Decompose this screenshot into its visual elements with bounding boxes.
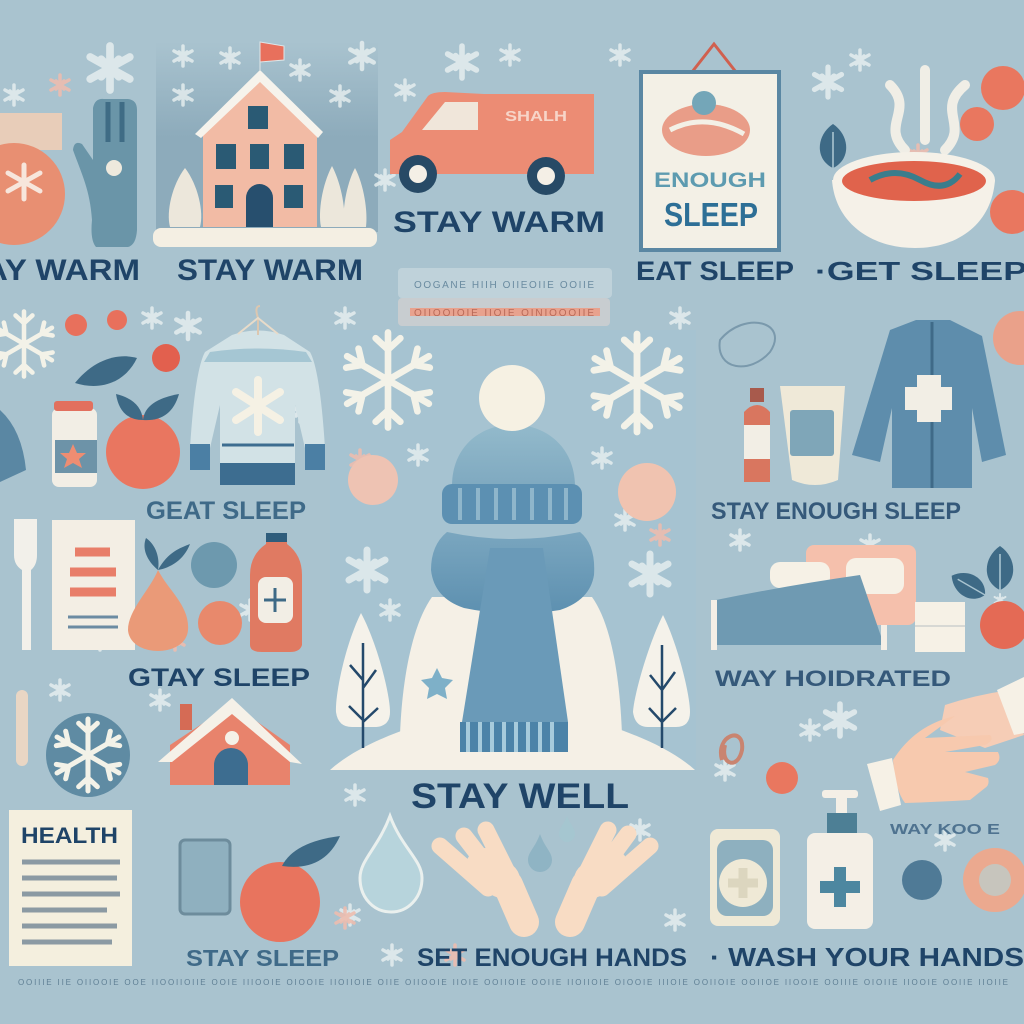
panel: hands and soap xyxy=(710,677,1024,972)
icon: heart xyxy=(65,314,87,336)
heading: stay enough sleep: STAY ENOUGH SLEEP xyxy=(711,498,961,525)
icon: soap bottle xyxy=(807,790,873,929)
panel: house backdrop xyxy=(156,42,378,232)
icon: large snowflakes xyxy=(346,332,430,428)
icon: health document xyxy=(9,810,132,966)
panel: van xyxy=(390,92,605,239)
icon: right tree xyxy=(633,615,690,748)
note small lines xyxy=(68,617,118,627)
icon: red flower xyxy=(152,344,180,372)
icon: scarf wrap xyxy=(431,532,594,614)
icon: van body xyxy=(390,92,594,174)
icon: bottle xyxy=(744,388,770,482)
icon: swirl xyxy=(721,736,742,763)
icon: nightstand xyxy=(915,602,965,652)
heading: way hoidrated: WAY HOIDRATED xyxy=(715,666,951,691)
icon: snow mound xyxy=(400,597,622,735)
icon: cup xyxy=(780,386,845,485)
icon: cardigan xyxy=(852,320,1006,488)
icon: cuff xyxy=(867,758,901,811)
icon: orange ball xyxy=(198,601,242,645)
icon: glass of water xyxy=(180,840,230,914)
icon: sleeve band xyxy=(997,677,1024,735)
document lines xyxy=(22,862,120,942)
panel: fork and fruit xyxy=(14,519,310,692)
heading: get sleep: ·GET SLEEP xyxy=(815,256,1024,286)
heading: stay well: STAY WELL xyxy=(411,777,629,816)
icon: apple xyxy=(106,394,180,489)
heading: set enough hands: SET ENOUGH HANDS xyxy=(417,944,687,972)
icon: water drop xyxy=(360,816,422,912)
icon: pom pom xyxy=(479,365,545,431)
panel: enough sleep poster xyxy=(636,44,794,286)
icon: orange slices xyxy=(981,66,1024,110)
poster text: enough: ENOUGH xyxy=(654,169,766,192)
icon: pear leaves xyxy=(144,538,190,570)
icon: flag xyxy=(260,42,284,70)
icon: hat brim xyxy=(442,484,582,524)
icon: jar xyxy=(52,401,97,487)
icon: fruit flower xyxy=(8,165,40,199)
icon: house walls xyxy=(203,78,317,227)
icon: hanger xyxy=(692,44,736,72)
icon: pillows xyxy=(846,558,904,594)
icon: glove spot xyxy=(106,160,122,176)
icon: flower orange xyxy=(963,848,1024,912)
icon: apple xyxy=(980,601,1024,649)
heading: stay warm: STAY WARM xyxy=(393,206,605,239)
small faded heading: WAY KOO E xyxy=(890,821,1000,838)
panel: soup bowl xyxy=(815,66,1024,286)
icon: big snowflake xyxy=(0,312,53,376)
icon: note xyxy=(52,520,135,650)
icon: poster art xyxy=(662,91,750,156)
icon: windows xyxy=(215,106,304,208)
icon: mound flower xyxy=(421,668,453,699)
icon: steam xyxy=(890,70,965,150)
icon: thermometer xyxy=(16,690,28,766)
heading: eat sleep: EAT SLEEP xyxy=(636,256,794,286)
icon: glove fingers xyxy=(108,102,122,142)
icon: right hand xyxy=(570,830,650,922)
icon: soap bar xyxy=(710,829,780,926)
icon: bottle xyxy=(250,533,302,652)
panel: health xyxy=(9,690,340,971)
panel: house xyxy=(153,42,377,287)
icon: beanie xyxy=(452,424,575,486)
footer microtext: OOIIIE IIE OIIOOIE OOE IIOOIIOIIE OOIE IIIOOIE OIOOIE IIOIIOIE OIIE OIIOOIE IIOIE OOIIOIE OOIIE IIOIIOIE OIOOIE IIIOIE OOIIOIE OOIIOE IIOOIE OOIIIE OIOIIE IIOOIE OOIIE IIOIIE xyxy=(18,978,1008,987)
icon: plant xyxy=(946,566,991,605)
icon: right trees xyxy=(320,166,367,227)
banner xyxy=(398,268,612,326)
van label: SHALH xyxy=(505,108,567,125)
heading: stay warm: STAY WARM xyxy=(177,254,363,287)
icon: thread loop xyxy=(720,323,775,366)
icon: snow base xyxy=(330,726,695,770)
icon: soup xyxy=(833,152,995,208)
icon: bed legs xyxy=(714,600,884,650)
icon: peach flowers xyxy=(348,455,398,505)
icon: leaf sprig xyxy=(75,356,137,386)
icon: orange fruit xyxy=(0,143,65,245)
icon: fork xyxy=(14,519,37,650)
banner: OIIOOIOIE IIOIE OINIOOOIIE xyxy=(414,308,594,319)
icon: orange slice xyxy=(993,311,1024,365)
panel: cardigan xyxy=(711,311,1024,525)
icon: blue ball xyxy=(191,542,237,588)
panel: stay warm glove xyxy=(0,99,140,287)
icon: sweater xyxy=(190,306,325,485)
icon: van window xyxy=(422,102,478,130)
icon: fluffy mitt cuff xyxy=(0,113,62,150)
icon: rear wheel xyxy=(527,157,565,195)
panel: bed xyxy=(714,545,1024,691)
heading: stay sleep: STAY SLEEP xyxy=(186,945,339,971)
icon: left hand xyxy=(440,830,524,922)
panel: centre backdrop xyxy=(330,330,696,770)
icon: left tree xyxy=(169,168,201,227)
icon: house roof xyxy=(195,70,323,138)
icon: small virus xyxy=(766,762,798,794)
icon: back hand xyxy=(940,690,1024,748)
icon: flower blue xyxy=(902,860,942,900)
icon: snowflake disc xyxy=(46,713,130,797)
icon: red dot xyxy=(107,310,127,330)
document title: HEALTH xyxy=(21,823,118,848)
icon: left tree xyxy=(336,613,390,748)
icon: door xyxy=(246,184,273,227)
icon: poster frame xyxy=(641,72,779,250)
icon: small house xyxy=(158,698,302,785)
poster text: sleep: SLEEP xyxy=(664,196,758,233)
icon: plant xyxy=(0,410,26,482)
icon: small drops xyxy=(528,834,552,872)
icon: scarf fringe xyxy=(460,722,568,752)
icon: apple xyxy=(240,836,340,942)
icon: headboard xyxy=(806,545,916,625)
icon: flower centre xyxy=(979,864,1011,896)
panel: sweater xyxy=(0,306,325,525)
icon: front hand xyxy=(893,716,999,803)
icon: glove xyxy=(73,99,137,247)
icon: pear xyxy=(128,570,188,651)
icon: front wheel xyxy=(399,155,437,193)
icon: blanket xyxy=(716,575,884,645)
heading: geat sleep: GEAT SLEEP xyxy=(146,497,306,525)
icon: scarf tail xyxy=(462,548,568,722)
panel: centre hat and scarf xyxy=(330,332,695,972)
heading: gtay sleep: GTAY SLEEP xyxy=(128,664,310,692)
icon: leaf xyxy=(820,124,846,168)
icon: snow ground xyxy=(153,228,377,247)
banner text: OOGANE HIIH OIIEOIIE OOIIE xyxy=(414,280,594,291)
icon: bowl xyxy=(832,180,995,248)
heading: wash your hands: · WASH YOUR HANDS xyxy=(710,942,1024,972)
note marks xyxy=(70,552,116,592)
